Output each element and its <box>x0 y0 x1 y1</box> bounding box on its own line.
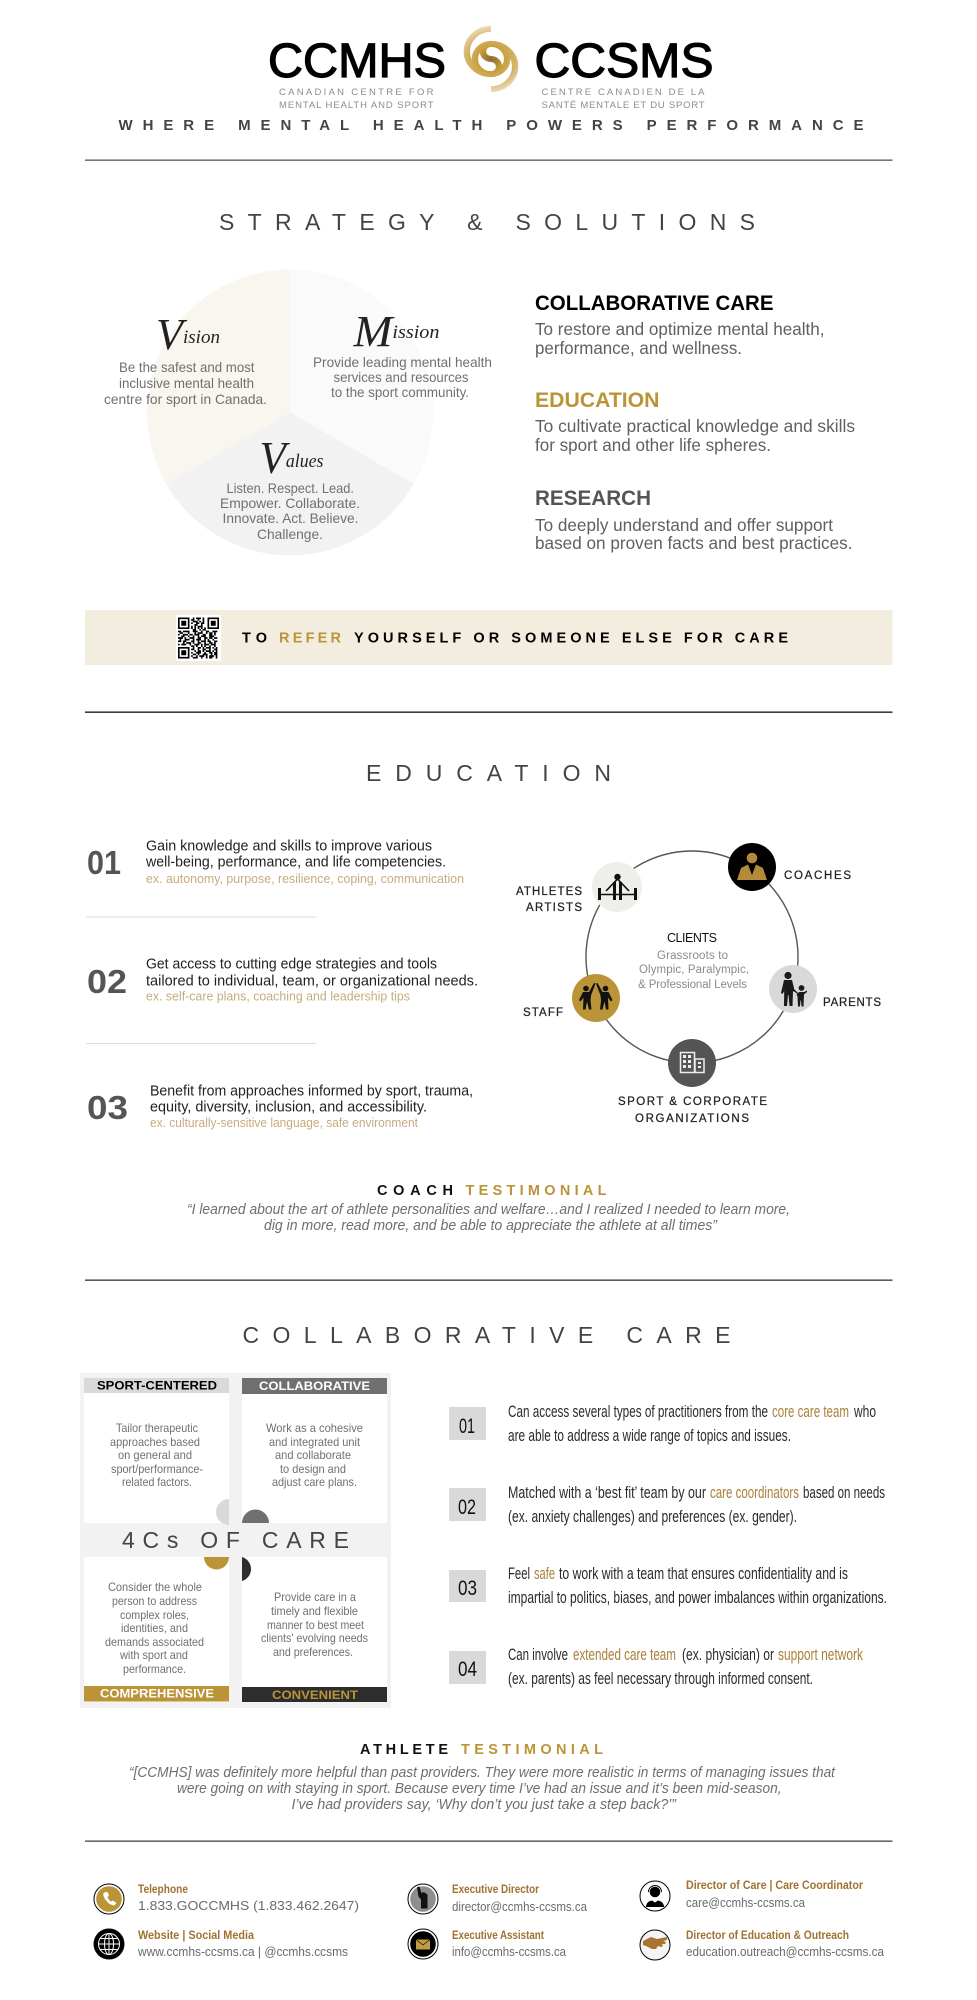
panel: 4Cs of care <box>80 1373 391 1708</box>
quadrant: convenient: timely and flexible <box>271 1604 358 1618</box>
mission text: services and resources <box>334 369 468 385</box>
French centre name: SANTÉ MENTALE ET DU SPORT <box>542 100 705 111</box>
English centre name: CANADIAN CENTRE FOR <box>279 87 434 98</box>
referral call to action: YOURSELF OR SOMEONE ELSE FOR CARE <box>354 630 788 646</box>
vision text: Be the safest and most <box>119 359 255 375</box>
quadrant: convenient: manner to best meet <box>267 1618 365 1632</box>
contact: director of care: care@ccmhs-ccsms.ca <box>686 1895 806 1910</box>
icon: headset person <box>640 1881 670 1911</box>
list item: care 01: 01 <box>459 1415 475 1438</box>
list item: care 03: to work with a team that ensures confidentiality and is <box>559 1564 848 1583</box>
list item: care 03: 03 <box>458 1577 477 1600</box>
text block: collaborative care: To restore and optimize mental health, <box>535 319 824 339</box>
list item: education 03: Benefit from approaches informed by sport, trauma, <box>150 1084 473 1100</box>
quadrant: collaborative: and collaborate <box>275 1448 351 1462</box>
list item: education 02: 02 <box>87 963 127 1000</box>
vision text: centre for sport in Canada. <box>104 391 267 407</box>
text block: education <box>535 389 855 455</box>
quadrant: comprehensive: demands associated <box>105 1635 204 1649</box>
label: staff: STAFF <box>523 1007 563 1019</box>
list item: care 04: 04 <box>458 1658 477 1681</box>
list item: care 02: 02 <box>458 1496 476 1519</box>
quadrant: comprehensive <box>84 1557 229 1702</box>
heading: education: EDUCATION <box>366 760 611 786</box>
icon: gold spiral logo <box>467 29 515 89</box>
quadrant: sport-centered <box>84 1378 229 1525</box>
contact: website and social media: Website | Social Media <box>138 1930 255 1942</box>
text block: research <box>535 487 852 553</box>
quadrant: convenient: clients' evolving needs <box>261 1631 368 1645</box>
quadrant: convenient: and preferences. <box>273 1645 353 1659</box>
mission text: to the sport community. <box>331 384 469 400</box>
icon: athletes weightlifter <box>592 862 642 912</box>
vision text: inclusive mental health <box>119 375 254 391</box>
quadrant: collaborative <box>242 1378 387 1523</box>
list item: education 03: ex. culturally-sensitive language, safe environment <box>150 1116 419 1130</box>
testimonial: coach: “I learned about the art of athlete personalities and welfare…and I realized I needed to learn more, <box>187 1202 790 1218</box>
text block: education: EDUCATION <box>535 389 660 412</box>
centre label: clients: Olympic, Paralympic, <box>639 964 749 976</box>
quadrant: comprehensive: with sport and <box>119 1648 188 1662</box>
heading: collaborative care: COLLABORATIVE CARE <box>242 1322 730 1348</box>
mission text <box>313 307 492 400</box>
chart: clients circle diagram <box>516 843 881 1125</box>
list item: care 02: care coordinators <box>710 1483 799 1502</box>
quadrant: sport-centered: sport/performance- <box>111 1462 203 1476</box>
pie sector: mission <box>290 270 433 484</box>
quadrant: convenient: Provide care in a <box>274 1590 356 1604</box>
values text: Challenge. <box>257 526 323 542</box>
centre label: clients: Grassroots to <box>657 950 728 962</box>
text block: collaborative care <box>535 292 824 358</box>
list item: education 01: ex. autonomy, purpose, resilience, coping, communication <box>146 872 464 886</box>
text block: collaborative care: performance, and wellness. <box>535 338 742 358</box>
contact: director of education and outreach: Director of Education & Outreach <box>686 1930 849 1942</box>
values text: alues <box>286 451 324 472</box>
quadrant: comprehensive: complex roles, <box>120 1608 189 1622</box>
text block: research: RESEARCH <box>535 487 651 510</box>
contact: executive assistant: Executive Assistant <box>452 1930 544 1942</box>
icon: staff high five <box>572 974 620 1022</box>
list item: care 03 <box>449 1564 887 1607</box>
icon: sport and corporate organizations <box>668 1039 716 1087</box>
centre band title: 4Cs OF CARE <box>122 1527 349 1553</box>
list item: education 01: 01 <box>87 844 121 881</box>
contact: director of education and outreach <box>640 1930 885 1960</box>
quadrant: comprehensive: performance. <box>123 1662 186 1676</box>
French centre name: CENTRE CANADIEN DE LA <box>542 87 705 98</box>
list item: care 03: safe <box>534 1564 555 1583</box>
quadrant: sport-centered: SPORT-CENTERED <box>97 1378 217 1392</box>
values text <box>220 432 360 542</box>
text block: education: To cultivate practical knowledge and skills <box>535 416 855 436</box>
quadrant: comprehensive: COMPREHENSIVE <box>100 1686 214 1700</box>
contact: telephone <box>94 1884 359 1914</box>
vision text: V <box>156 310 188 359</box>
testimonial: coach: COACH <box>377 1183 453 1199</box>
panel: referral banner <box>85 610 892 665</box>
list item: care 02 <box>449 1483 885 1526</box>
pie sector: values <box>166 412 414 555</box>
French centre name <box>542 87 705 111</box>
list item: care 04 <box>449 1645 863 1688</box>
icon: globe <box>94 1928 124 1960</box>
referral call to action: TO <box>242 630 267 646</box>
testimonial: athlete: “[CCMHS] was definitely more helpful than past providers. They were more realistic in terms of managing issues that <box>129 1765 836 1781</box>
testimonial: athlete: TESTIMONIAL <box>461 1742 603 1758</box>
contact: executive director: director@ccmhs-ccsms.ca <box>452 1899 588 1914</box>
quadrant: convenient: CONVENIENT <box>272 1688 359 1702</box>
contact: telephone: 1.833.GOCCMHS (1.833.462.2647) <box>138 1898 359 1913</box>
list item: education 01 <box>87 838 464 886</box>
wordmark: CCMHS: CCMHS <box>268 35 446 88</box>
icon: telephone <box>94 1884 124 1914</box>
panel: vision mission values pie <box>104 270 492 555</box>
values text: Innovate. Act. Believe. <box>222 510 358 526</box>
list item: education 02: Get access to cutting edge strategies and tools <box>146 956 437 972</box>
values text: Listen. Respect. Lead. <box>226 480 354 496</box>
list item: education 01: Gain knowledge and skills to improve various <box>146 838 432 854</box>
list item: care 04: extended care team <box>573 1645 676 1664</box>
contact: website and social media <box>94 1928 348 1960</box>
icon: parents <box>769 965 817 1013</box>
values text: V <box>260 432 290 483</box>
testimonial: athlete: were going on with staying in sport. Because every time I’ve had an issue and it’s been mid-season, <box>177 1781 782 1797</box>
list item: care 03: Feel <box>508 1564 530 1583</box>
list item: education 03: 03 <box>87 1089 128 1126</box>
label: athletes artists: ATHLETES <box>516 886 582 898</box>
quadrant: collaborative: and integrated unit <box>269 1435 361 1449</box>
contact: director of care: Director of Care | Care Coordinator <box>686 1880 863 1892</box>
list item: care 01: core care team <box>772 1402 849 1421</box>
quadrant: collaborative: COLLABORATIVE <box>259 1379 370 1393</box>
list item: education 02 <box>87 956 478 1004</box>
label: athletes artists <box>516 886 582 914</box>
quadrant: collaborative: Work as a cohesive <box>266 1421 363 1435</box>
vision text <box>104 310 267 407</box>
mission text: Provide leading mental health <box>313 354 492 370</box>
referral call to action: REFER <box>279 630 342 646</box>
list item: care 01: who <box>853 1402 876 1421</box>
quadrant: comprehensive: identities, and <box>121 1621 188 1635</box>
list item: care 02: (ex. anxiety challenges) and preferences (ex. gender). <box>508 1507 797 1526</box>
pie sector: vision <box>147 270 290 484</box>
label: sport and corporate organizations <box>618 1096 767 1125</box>
contact: executive assistant: info@ccmhs-ccsms.ca <box>452 1944 567 1959</box>
quadrant: sport-centered: on general and <box>118 1448 192 1462</box>
list item: education 03: equity, diversity, inclusion, and accessibility. <box>150 1100 427 1116</box>
contact: executive director: Executive Director <box>452 1884 539 1896</box>
text block: research: based on proven facts and best practices. <box>535 533 852 553</box>
icon: executive director <box>408 1884 438 1914</box>
values text: Empower. Collaborate. <box>220 495 360 511</box>
header: logo and tagline <box>118 29 864 134</box>
mission text: ission <box>392 322 440 343</box>
list item: care 04: Can involve <box>508 1645 568 1664</box>
contact: executive director <box>408 1884 588 1914</box>
list item: care 01 <box>449 1402 876 1445</box>
English centre name <box>279 87 434 111</box>
testimonial: athlete: I’ve had providers say, ‘Why don’t you just take a step back?’” <box>292 1797 677 1813</box>
contact: director of care <box>640 1880 863 1911</box>
text block: collaborative care: COLLABORATIVE CARE <box>535 292 774 315</box>
list item: education 03 <box>87 1084 473 1130</box>
list item: care 02: Matched with a ‘best fit’ team by our <box>508 1483 706 1502</box>
label: athletes artists: ARTISTS <box>526 902 582 914</box>
text block: education: for sport and other life spheres. <box>535 435 771 455</box>
tagline: WHERE MENTAL HEALTH POWERS PERFORMANCE <box>118 117 864 134</box>
quadrant: sport-centered: related factors. <box>122 1475 192 1489</box>
list item: care 01: are able to address a wide range of topics and issues. <box>508 1426 791 1445</box>
list item: care 02: based on needs <box>803 1483 885 1502</box>
list item: education 02: tailored to individual, team, or organizational needs. <box>146 974 478 990</box>
list item: care 01: Can access several types of practitioners from the <box>508 1402 768 1421</box>
quadrant: collaborative: adjust care plans. <box>272 1475 357 1489</box>
centre label: clients <box>638 931 749 991</box>
quadrant: sport-centered: approaches based <box>110 1435 200 1449</box>
English centre name: MENTAL HEALTH AND SPORT <box>279 100 434 111</box>
heading: strategy and solutions: STRATEGY & SOLUTIONS <box>219 209 755 235</box>
list item: care 04: (ex. physician) or <box>682 1645 774 1664</box>
contact: telephone: Telephone <box>138 1884 188 1896</box>
centre label: clients: & Professional Levels <box>638 979 747 991</box>
quadrant: convenient <box>242 1557 387 1702</box>
label: parents: PARENTS <box>823 997 881 1009</box>
testimonial: coach: TESTIMONIAL <box>466 1183 607 1199</box>
icon: handshake <box>640 1930 670 1960</box>
icon: QR code <box>176 615 221 661</box>
list item: care 04: (ex. parents) as feel necessary through informed consent. <box>508 1669 813 1688</box>
contact: website and social media: www.ccmhs-ccsms.ca | @ccmhs.ccsms <box>137 1944 348 1959</box>
contact: executive assistant <box>408 1929 567 1959</box>
wordmark: CCSMS: CCSMS <box>534 35 714 88</box>
icon: envelope <box>408 1929 438 1959</box>
text block: research: To deeply understand and offer support <box>535 515 833 535</box>
contact: director of education and outreach: education.outreach@ccmhs-ccsms.ca <box>686 1944 885 1959</box>
list item: education 01: well-being, performance, and life competencies. <box>145 854 446 870</box>
label: coaches: COACHES <box>784 870 851 882</box>
list item: education 02: ex. self-care plans, coaching and leadership tips <box>146 990 410 1004</box>
quadrant: comprehensive: Consider the whole <box>108 1580 202 1594</box>
label: sport and corporate organizations: SPORT & CORPORATE <box>618 1096 767 1108</box>
quadrant: comprehensive: person to address <box>112 1594 197 1608</box>
list item: care 04: support network <box>778 1645 863 1664</box>
testimonial: coach <box>187 1183 790 1234</box>
label: sport and corporate organizations: ORGANIZATIONS <box>635 1113 749 1125</box>
vision text: ision <box>183 327 220 348</box>
mission text: M <box>352 307 395 356</box>
testimonial: coach: dig in more, read more, and be able to appreciate the athlete at all times” <box>264 1218 718 1234</box>
centre label: clients: CLIENTS <box>667 931 717 945</box>
quadrant: sport-centered: Tailor therapeutic <box>116 1421 198 1435</box>
testimonial: athlete <box>129 1742 836 1813</box>
quadrant: collaborative: to design and <box>280 1462 346 1476</box>
icon: coaches <box>728 843 776 891</box>
testimonial: athlete: ATHLETE <box>360 1742 448 1758</box>
